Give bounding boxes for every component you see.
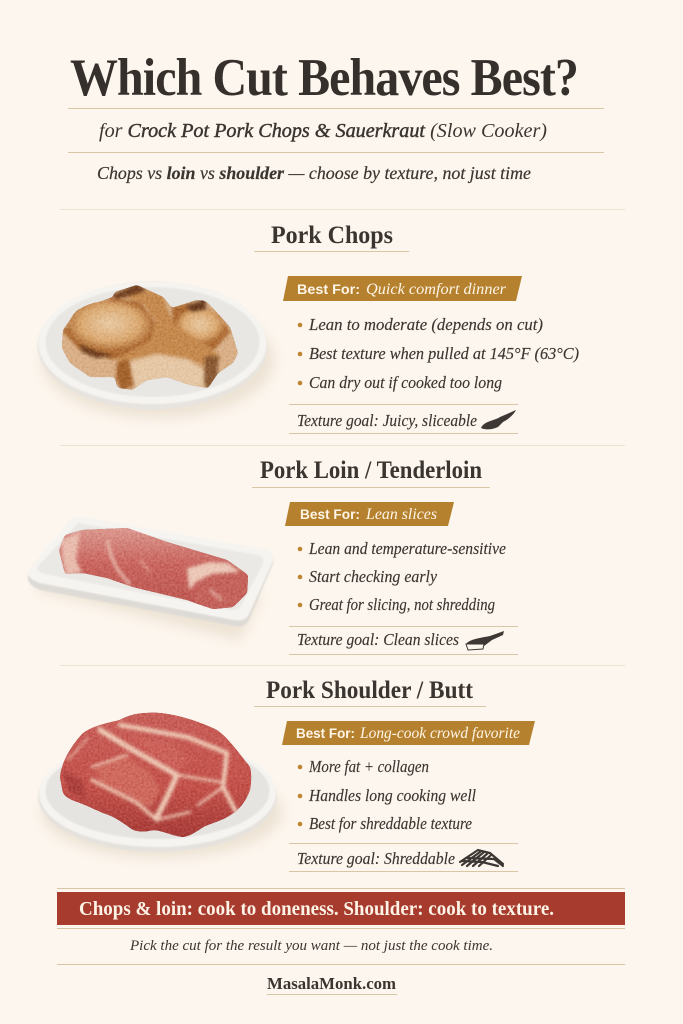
heading: pork loin: Pork Loin / Tenderloin (260, 457, 482, 484)
bullet list: Best for shreddable texture (309, 814, 472, 833)
badge: best for: Best For: (296, 726, 355, 741)
icon: shredded meat (460, 850, 503, 866)
bullet list: Can dry out if cooked too long (309, 373, 502, 392)
bullet list: Lean and temperature-sensitive (308, 539, 506, 558)
bullet list (298, 757, 476, 833)
badge: best for (282, 721, 535, 745)
bullet list: Start checking early (309, 567, 438, 586)
badge: best for: Quick comfort dinner (366, 281, 507, 298)
banner: key takeaway (57, 888, 625, 928)
icon: knife (481, 410, 516, 429)
image: pork chops on a plate (38, 282, 274, 418)
texture goal: Texture goal: Clean slices (297, 630, 459, 649)
badge: best for: Best For: (297, 282, 360, 297)
bullet list: Great for slicing, not shredding (309, 595, 495, 614)
image: loin on a tray (28, 517, 274, 640)
badge: best for: Best For: (300, 507, 360, 522)
bullet list: Handles long cooking well (308, 786, 476, 805)
icon: slicing knife (466, 631, 504, 650)
title: Which Cut Behaves Best? (70, 49, 578, 107)
texture goal: Texture goal: Juicy, sliceable (297, 411, 477, 430)
bullet list: Best texture when pulled at 145°F (63°C) (309, 344, 579, 363)
heading: pork shoulder: Pork Shoulder / Butt (266, 677, 474, 704)
badge: best for: Lean slices (365, 506, 437, 523)
heading: pork chops: Pork Chops (271, 222, 393, 249)
footer: site name: MasalaMonk.com (267, 974, 396, 993)
panel: pork loin (28, 457, 518, 654)
banner: key takeaway: Chops & loin: cook to doneness. Shoulder: cook to texture. (79, 898, 554, 920)
bullet list: Lean to moderate (depends on cut) (308, 315, 543, 334)
subtitle: for Crock Pot Pork Chops & Sauerkraut (Slow Cooker) (99, 120, 547, 142)
texture goal: Texture goal: Shreddable (297, 849, 455, 868)
tagline: Chops vs loin vs shoulder — choose by texture, not just time (97, 163, 531, 183)
panel: pork shoulder (38, 677, 535, 872)
panel: pork chops (38, 222, 579, 434)
badge: best for: Long-cook crowd favorite (359, 725, 520, 742)
bullet list (298, 539, 506, 614)
badge: best for (283, 276, 522, 301)
bullet list (298, 315, 579, 392)
image: shoulder on a plate (38, 713, 282, 858)
closing note: Pick the cut for the result you want — not just the cook time. (129, 938, 493, 954)
badge: best for (285, 502, 454, 526)
bullet list: More fat + collagen (308, 757, 429, 776)
